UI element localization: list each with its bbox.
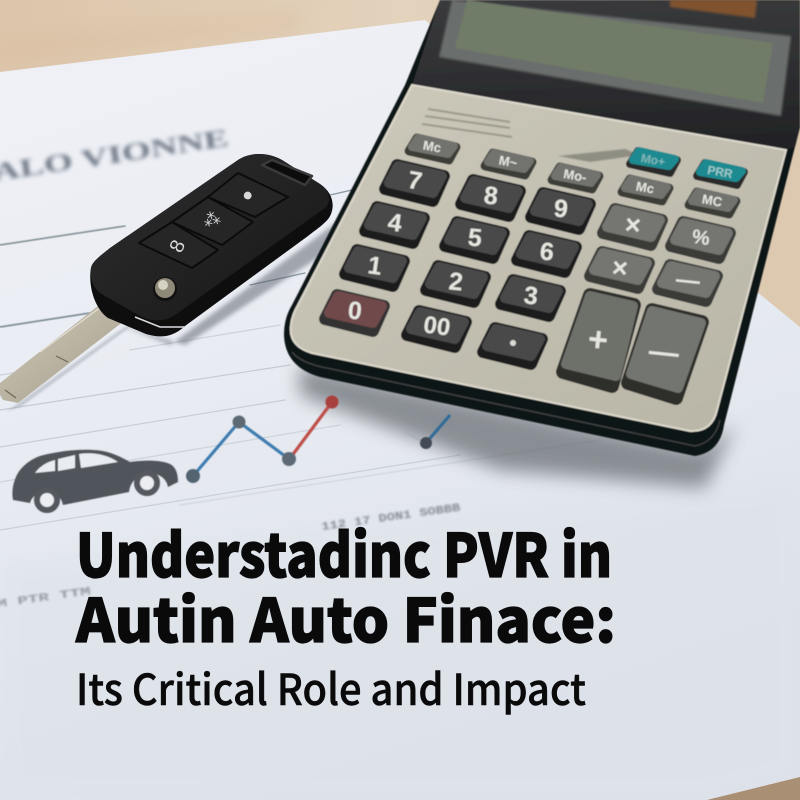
title line 2: Autin Auto Finace: — [75, 573, 616, 660]
key 8: 8 — [483, 181, 499, 211]
fob body — [90, 154, 333, 336]
fob button glyphs: 8 — [166, 237, 190, 256]
key 0 maroon — [325, 295, 384, 331]
key minus small: — — [675, 266, 701, 295]
lower paper tone — [0, 480, 800, 800]
teal key M+: Mo+ — [640, 151, 666, 169]
faceplate accent line — [558, 149, 640, 162]
fob shadow — [120, 220, 345, 345]
fob buttons — [139, 173, 288, 268]
calculator LCD screen — [455, 0, 773, 103]
key minus large — [628, 310, 702, 398]
key 6: 6 — [539, 237, 555, 267]
key Mc: Mc — [635, 179, 655, 196]
key 00: 00 — [422, 311, 452, 342]
key Mc left: Mc — [422, 138, 442, 155]
key plus large — [563, 295, 634, 386]
bottom right wood corner shading — [707, 777, 800, 800]
partially hidden chart fragment — [404, 415, 450, 449]
title block — [75, 508, 616, 718]
key 9: 9 — [553, 194, 569, 224]
car icon — [12, 450, 178, 510]
key percent: % — [691, 226, 711, 250]
key decimal — [483, 328, 542, 364]
calculator upper dark housing — [412, 0, 800, 150]
rear car wheel — [37, 490, 57, 510]
key 2 — [426, 266, 485, 302]
key Mo- — [552, 166, 599, 189]
line chart — [186, 396, 338, 483]
solar strip — [670, 0, 757, 18]
key 0 maroon: 0 — [347, 296, 363, 326]
key Mo-: Mo- — [562, 166, 588, 185]
key MC: MC — [701, 191, 724, 210]
key minus large: — — [647, 335, 681, 370]
car key fob: ● — [236, 185, 258, 205]
calculator — [284, 0, 800, 456]
car key fob: ⁂ — [201, 208, 223, 231]
key 3 — [501, 280, 560, 316]
wood grain streak — [0, 10, 300, 62]
key 1 — [345, 250, 404, 286]
fob rivet — [153, 277, 177, 301]
teal key PRR: PRR — [706, 163, 734, 181]
calculator faceplate — [291, 85, 786, 431]
key 4: 4 — [386, 208, 404, 238]
title line 1: Understadinc PVR in — [76, 508, 612, 595]
subtitle: Its Critical Role and Impact — [76, 656, 586, 718]
car key fob — [0, 154, 345, 412]
calculator body rim stripe — [292, 352, 720, 446]
key multiply lower — [590, 252, 649, 288]
teal key PRR — [697, 163, 744, 185]
key multiply lower: × — [610, 252, 629, 284]
calculator outer body — [284, 0, 800, 456]
key 7: 7 — [406, 166, 424, 196]
key Mc — [622, 179, 669, 201]
key 00 — [407, 311, 466, 347]
key 1: 1 — [366, 251, 384, 281]
key 5: 5 — [467, 223, 483, 253]
teal key M+ — [630, 151, 677, 173]
key M~ — [485, 153, 532, 175]
key blade — [0, 302, 140, 412]
fob seam highlight — [135, 317, 185, 327]
key Mc left — [409, 138, 456, 160]
key 4 — [365, 207, 424, 243]
key 6 — [517, 236, 576, 272]
key 5 — [445, 222, 504, 258]
key 3: 3 — [523, 281, 539, 311]
key 8 — [461, 180, 520, 216]
car windows — [35, 453, 118, 473]
calculator drop shadow on paper — [300, 365, 735, 488]
blurred small text right: 112 17 DON1 SOBBB — [321, 503, 462, 534]
key plus large: + — [586, 320, 610, 360]
key M~: M~ — [498, 153, 519, 171]
key percent — [671, 222, 730, 258]
key 2: 2 — [448, 267, 464, 297]
fob key ring slot — [262, 160, 312, 185]
key MC — [689, 191, 736, 214]
key multiply top — [603, 209, 662, 245]
key minus small — [658, 265, 717, 301]
key 7 — [385, 165, 444, 201]
faceplate small print — [422, 109, 512, 137]
front car wheel — [137, 473, 157, 493]
key multiply top: × — [623, 209, 642, 241]
key 9 — [531, 193, 590, 229]
calculator display bezel — [439, 0, 791, 116]
ruled lines on paper — [0, 190, 600, 530]
